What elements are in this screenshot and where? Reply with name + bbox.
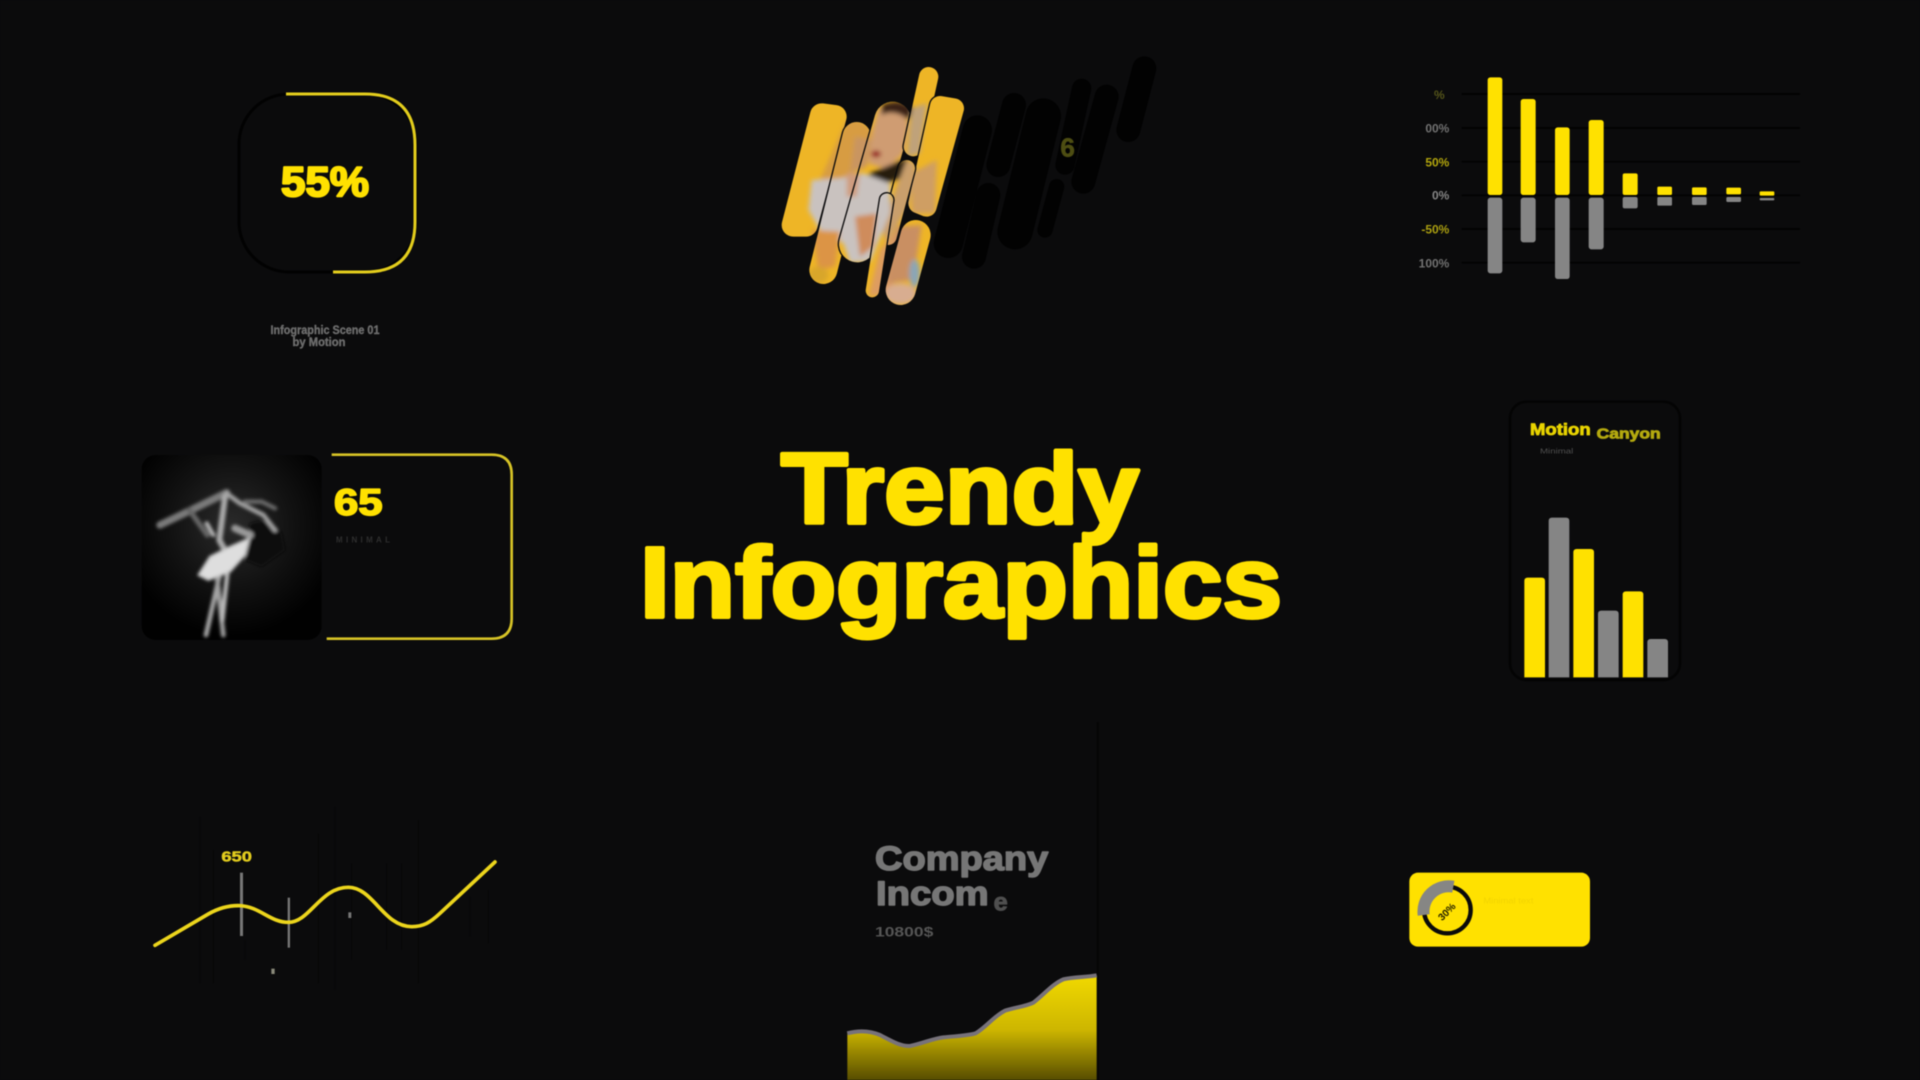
face xyxy=(868,107,908,169)
axis labels: 0% xyxy=(1432,189,1450,203)
gauge caption: by Motion xyxy=(292,337,346,349)
gauge caption: Infographic Scene 01 xyxy=(270,325,380,337)
chart heading: Minimal xyxy=(1540,448,1574,455)
photo strips xyxy=(780,66,965,306)
shirt xyxy=(808,173,890,263)
blonde hair right xyxy=(907,103,927,157)
title: Trendy xyxy=(781,433,1139,545)
trend line xyxy=(155,862,495,945)
income heading: e xyxy=(994,889,1008,917)
panel: diverging bar chart xyxy=(1419,77,1800,279)
panel: slanted photo strips xyxy=(767,50,1144,317)
axis labels: 00% xyxy=(1425,121,1450,135)
donut progress arc xyxy=(1423,886,1453,915)
positive bars xyxy=(1488,77,1774,196)
axis labels: 100% xyxy=(1419,256,1450,270)
dark slanted strips xyxy=(948,68,1144,257)
panel: company income xyxy=(847,722,1099,1080)
title: Infographics xyxy=(640,527,1282,639)
axis labels xyxy=(1419,88,1450,270)
panel: photo card with 65 xyxy=(142,455,512,640)
card subtitle: MINIMAL xyxy=(336,536,390,545)
chart heading xyxy=(1530,420,1661,455)
panel: 30 percent yellow card xyxy=(1409,873,1590,947)
axis labels: 50% xyxy=(1425,155,1450,169)
card outline xyxy=(327,455,512,639)
right edge of panel xyxy=(1097,722,1099,1080)
card value: 65 xyxy=(334,481,383,523)
panel: 55 percent rounded gauge xyxy=(239,94,416,349)
arms and skin xyxy=(812,230,840,270)
axis labels: % xyxy=(1434,88,1445,102)
hair xyxy=(820,119,872,183)
panel: phone bar chart xyxy=(1510,402,1680,680)
panel: line chart xyxy=(155,807,495,990)
marker lines xyxy=(240,873,351,974)
donut ring xyxy=(1424,887,1471,933)
photo of dancer xyxy=(142,455,322,640)
chart bars xyxy=(1524,518,1668,677)
faint column lines xyxy=(200,807,488,990)
chart heading: Canyon xyxy=(1597,426,1661,442)
donut value: 30% xyxy=(1436,901,1458,923)
chart heading: Motion xyxy=(1530,420,1591,439)
income heading: Company xyxy=(875,840,1048,878)
negative bars xyxy=(1488,197,1774,279)
income heading: Incom xyxy=(876,875,989,913)
card background xyxy=(1409,873,1590,947)
faded digit: 6 xyxy=(1060,133,1075,163)
faded label: Minimal text xyxy=(1483,896,1534,905)
title xyxy=(640,433,1282,639)
gauge track xyxy=(239,94,416,272)
gauge progress stroke xyxy=(286,94,415,272)
gauge value: 55% xyxy=(281,158,369,205)
income heading xyxy=(875,840,1048,917)
gauge caption xyxy=(270,325,380,349)
grid lines xyxy=(1462,94,1800,263)
income value: 10800$ xyxy=(875,924,934,940)
phone outline xyxy=(1510,402,1680,680)
point value: 650 xyxy=(221,850,252,866)
area chart xyxy=(847,975,1097,1080)
axis labels: -50% xyxy=(1421,223,1450,237)
